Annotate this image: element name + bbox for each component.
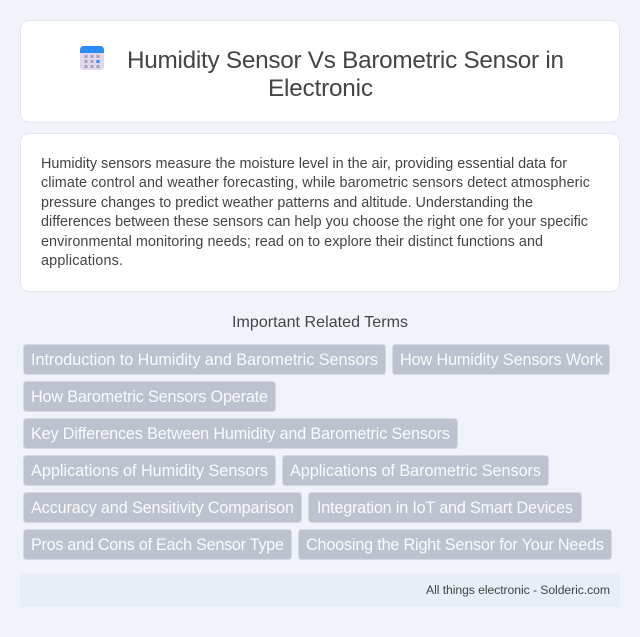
panel: title header [20, 20, 620, 122]
icon: calendar grid [80, 46, 104, 70]
footer bar [20, 573, 620, 607]
paragraph text: environmental monitoring needs; read on to explore their distinct functions and [41, 234, 543, 250]
chip: accuracy and sensitivity: Accuracy and Sensitivity Comparison [31, 499, 294, 517]
chip: accuracy and sensitivity [24, 492, 302, 522]
paragraph text: differences between these sensors can help you choose the right one for your specific [41, 214, 588, 230]
heading: important related terms: Important Related Terms [232, 314, 408, 331]
chip: how barometric sensors operate: How Barometric Sensors Operate [31, 388, 268, 406]
paragraph text: climate control and weather forecasting, while barometric sensors detect atmospheric [41, 175, 590, 191]
chip: applications of humidity sensors: Applications of Humidity Sensors [31, 462, 268, 480]
title line 1: Humidity Sensor Vs Barometric Sensor in [127, 47, 564, 74]
paragraph text: Humidity sensors measure the moisture level in the air, providing essential data for [41, 156, 567, 172]
chip: integration in iot: Integration in IoT and Smart Devices [317, 499, 573, 517]
chip: key differences [24, 418, 458, 448]
chip: applications of humidity sensors [24, 456, 276, 486]
chip: how humidity sensors work [392, 344, 610, 374]
chip: introduction [24, 344, 386, 374]
paragraph text: pressure changes to predict weather patterns and altitude. Understanding the [41, 195, 533, 211]
paragraph text [41, 156, 590, 269]
chip: applications of barometric sensors: Applications of Barometric Sensors [290, 462, 541, 480]
chip: introduction: Introduction to Humidity and Barometric Sensors [31, 351, 378, 369]
chip: integration in iot [308, 492, 582, 522]
chip: how humidity sensors work: How Humidity Sensors Work [400, 351, 604, 369]
footer credit: All things electronic - Solderic.com [426, 583, 610, 597]
chip: key differences: Key Differences Between Humidity and Barometric Sensors [31, 425, 450, 443]
chip: pros and cons [24, 530, 292, 560]
paragraph text: applications. [41, 253, 123, 269]
chip: choosing the right sensor [298, 530, 612, 560]
chip: choosing the right sensor: Choosing the Right Sensor for Your Needs [306, 536, 604, 554]
chip: applications of barometric sensors [282, 456, 548, 486]
panel: intro paragraph [20, 134, 620, 292]
chip: how barometric sensors operate [24, 382, 276, 412]
panel: related term chips [24, 344, 612, 560]
title line 2: Electronic [268, 75, 373, 102]
chip: pros and cons: Pros and Cons of Each Sensor Type [31, 536, 284, 554]
